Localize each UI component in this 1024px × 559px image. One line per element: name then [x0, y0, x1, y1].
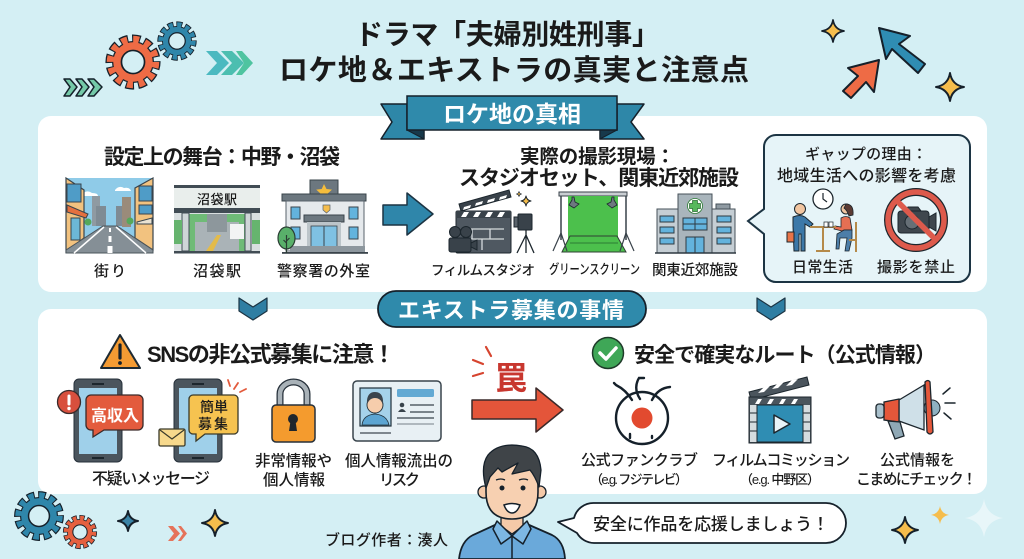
- icon: orange arrow: [843, 60, 879, 98]
- icon: no filming: [888, 192, 944, 248]
- banner: location truth: ロケ地の真相: [443, 101, 581, 127]
- label: film commission: [712, 452, 850, 487]
- icon: phone with high income message: [58, 379, 143, 462]
- illustration: blog author: [459, 445, 565, 559]
- label: check official info: 公式情報を: [880, 452, 955, 469]
- label: film studio: フィルムスタジオ: [431, 263, 535, 278]
- icon: trap character and burst: [473, 347, 527, 396]
- icon: blue gear bottom: [19, 496, 59, 536]
- label: check official info: こまめにチェック！: [856, 471, 977, 488]
- label: official fan club: （e.g. フジテレビ）: [590, 472, 688, 487]
- icon: station: [174, 185, 260, 254]
- arrow: toward safe route: [472, 388, 563, 432]
- icon: small green chevrons: [64, 79, 102, 96]
- heading: actual location: 実際の撮影現場：: [520, 146, 675, 168]
- icon: orange gear top left: [110, 39, 156, 85]
- title: ドラマ「夫婦別姓刑事」: [355, 19, 660, 50]
- label: station: 沼袋駅: [193, 263, 241, 280]
- heading: story setting: 設定上の舞台：中野・沼袋: [104, 146, 340, 169]
- icon: blue sparkle: [118, 511, 138, 531]
- label: street: 街り: [94, 263, 126, 280]
- speech bubble: 安全に作品を応援しましょう！: [593, 515, 829, 534]
- icon: gold sparkle bottom: [202, 510, 228, 536]
- panel: location truth: [38, 116, 987, 292]
- label: emergency and personal info: [255, 452, 332, 489]
- label: film commission: （e.g. 中野区）: [740, 472, 820, 487]
- heading: actual location: [459, 146, 739, 190]
- banner: extras recruitment: [378, 291, 646, 327]
- icon: warning triangle: [101, 335, 140, 368]
- banner: location truth: [381, 96, 644, 139]
- icon: blue arrow: [879, 28, 925, 73]
- icon: green screen: [553, 192, 634, 252]
- icon: street: [66, 178, 153, 253]
- icon: film commission clapper: [749, 377, 811, 443]
- label: green screen: グリーンスクリーン: [549, 261, 640, 277]
- label: official fan club: 公式ファンクラブ: [581, 451, 698, 469]
- label: data leak risk: 個人情報流出の: [345, 452, 453, 470]
- icon: teal chevrons: [206, 51, 253, 75]
- icon: phone with easy recruitment message: 募集: [198, 416, 228, 432]
- title: [279, 19, 749, 87]
- arrow: setting to real location: [383, 193, 433, 235]
- callout: reason for the gap: [748, 135, 970, 282]
- icon: gold sparkle right: [936, 73, 964, 101]
- icon: phone with high income message: 高収入: [91, 406, 139, 425]
- icon: blue gear top left: [161, 25, 193, 57]
- icon: gold sparkle plain: [931, 506, 949, 524]
- heading: SNS warning: SNSの非公式募集に注意！: [147, 342, 395, 367]
- icon: daily life: [787, 189, 856, 252]
- icon: megaphone: [876, 380, 955, 439]
- label: official fan club: [581, 451, 698, 487]
- icon: pale sparkle: [965, 499, 1003, 537]
- icon: ID card: [353, 381, 441, 441]
- label: Kanto facilities: 関東近郊施設: [652, 262, 738, 279]
- label: filming prohibited: 撮影を禁止: [877, 258, 955, 276]
- callout heading: 地域生活への影響を考慮: [777, 166, 956, 185]
- icon: orange chevrons: [168, 526, 187, 541]
- label: emergency and personal info: 個人情報: [263, 471, 325, 489]
- label: data leak risk: リスク: [379, 471, 420, 489]
- icon: down chevron left: [239, 298, 267, 320]
- icon: green check: [592, 338, 624, 368]
- icon: padlock: [272, 382, 315, 442]
- icon: station: 沼袋駅: [197, 192, 237, 207]
- icon: fan club logo: [614, 378, 670, 444]
- label: film commission: フィルムコミッション: [712, 452, 850, 469]
- label: police station: 警察署の外室: [277, 262, 370, 280]
- heading: safe route: 安全で確実なルート（公式情報）: [634, 344, 936, 367]
- icon: hospital: [655, 194, 736, 253]
- icon: orange gear bottom: [66, 518, 94, 546]
- heading: actual location: スタジオセット、関東近郊施設: [459, 167, 739, 190]
- callout heading: ギャップの理由：: [805, 146, 927, 163]
- icon: down chevron right: [757, 298, 785, 320]
- panel: extras recruitment: [38, 309, 987, 494]
- callout heading: [777, 146, 956, 185]
- banner: extras recruitment: エキストラ募集の事情: [398, 298, 624, 323]
- label: suspicious messages: 不疑いメッセージ: [92, 470, 210, 488]
- label: check official info: [856, 452, 977, 488]
- icon: phone with easy recruitment message: 簡単: [200, 399, 228, 415]
- icon: police station: [278, 180, 368, 254]
- icon: gold sparkle top: [822, 20, 844, 42]
- label: emergency and personal info: 非常情報や: [255, 452, 332, 470]
- label: daily life: 日常生活: [792, 259, 853, 276]
- author label: ブログ作者：湊人: [325, 531, 448, 549]
- icon: trap character and burst: 罠: [495, 360, 527, 396]
- speech bubble: [558, 503, 846, 543]
- icon: film studio: [449, 190, 534, 253]
- label: data leak risk: [345, 452, 453, 489]
- icon: phone with easy recruitment message: [159, 379, 246, 462]
- icon: gold sparkle outlined: [892, 517, 918, 543]
- title: ロケ地＆エキストラの真実と注意点: [279, 54, 749, 87]
